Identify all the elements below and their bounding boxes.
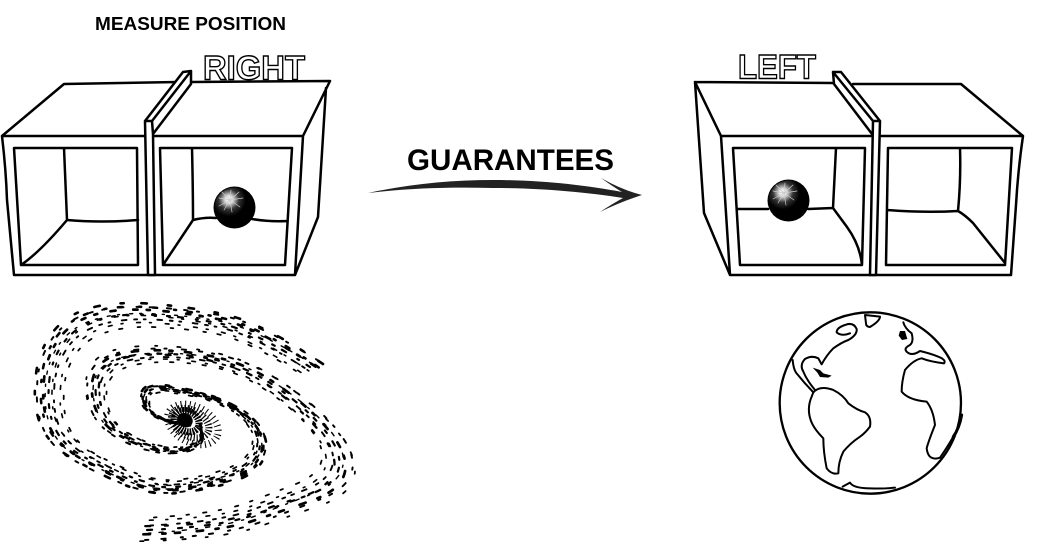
antarctic coast	[843, 483, 895, 489]
divider wall	[833, 72, 880, 275]
illustration: spiral galaxy	[33, 301, 357, 542]
caribbean islands	[813, 368, 832, 378]
galaxy core	[161, 396, 225, 453]
label: left: LEFT	[738, 48, 816, 86]
north america coast	[793, 324, 857, 392]
european island	[899, 331, 907, 340]
globe outline	[780, 312, 961, 494]
europe and africa coast	[902, 322, 953, 459]
arrow: guarantees	[368, 178, 642, 212]
ball in left box	[768, 180, 810, 222]
right box interior	[886, 148, 1012, 265]
right panel outer outline	[695, 82, 1023, 275]
greenland	[865, 315, 880, 327]
left panel: two boxes, ball in right box	[2, 71, 330, 275]
label: right: RIGHT	[203, 50, 305, 88]
label: guarantees: GUARANTEES	[407, 144, 614, 177]
divider wall	[145, 71, 191, 275]
heading: measure position: MEASURE POSITION	[95, 14, 286, 34]
ball in right box	[214, 186, 256, 228]
southern tip of africa shading	[953, 415, 962, 437]
left box outline	[2, 81, 330, 275]
galaxy arm two	[83, 345, 357, 542]
illustration: earth globe	[780, 312, 962, 494]
left box interior	[14, 148, 138, 265]
right panel: two boxes, ball in left box	[695, 72, 1023, 275]
left box interior	[733, 148, 865, 265]
south america coast	[809, 388, 870, 474]
galaxy arm one	[33, 301, 324, 496]
right box interior	[160, 148, 292, 265]
